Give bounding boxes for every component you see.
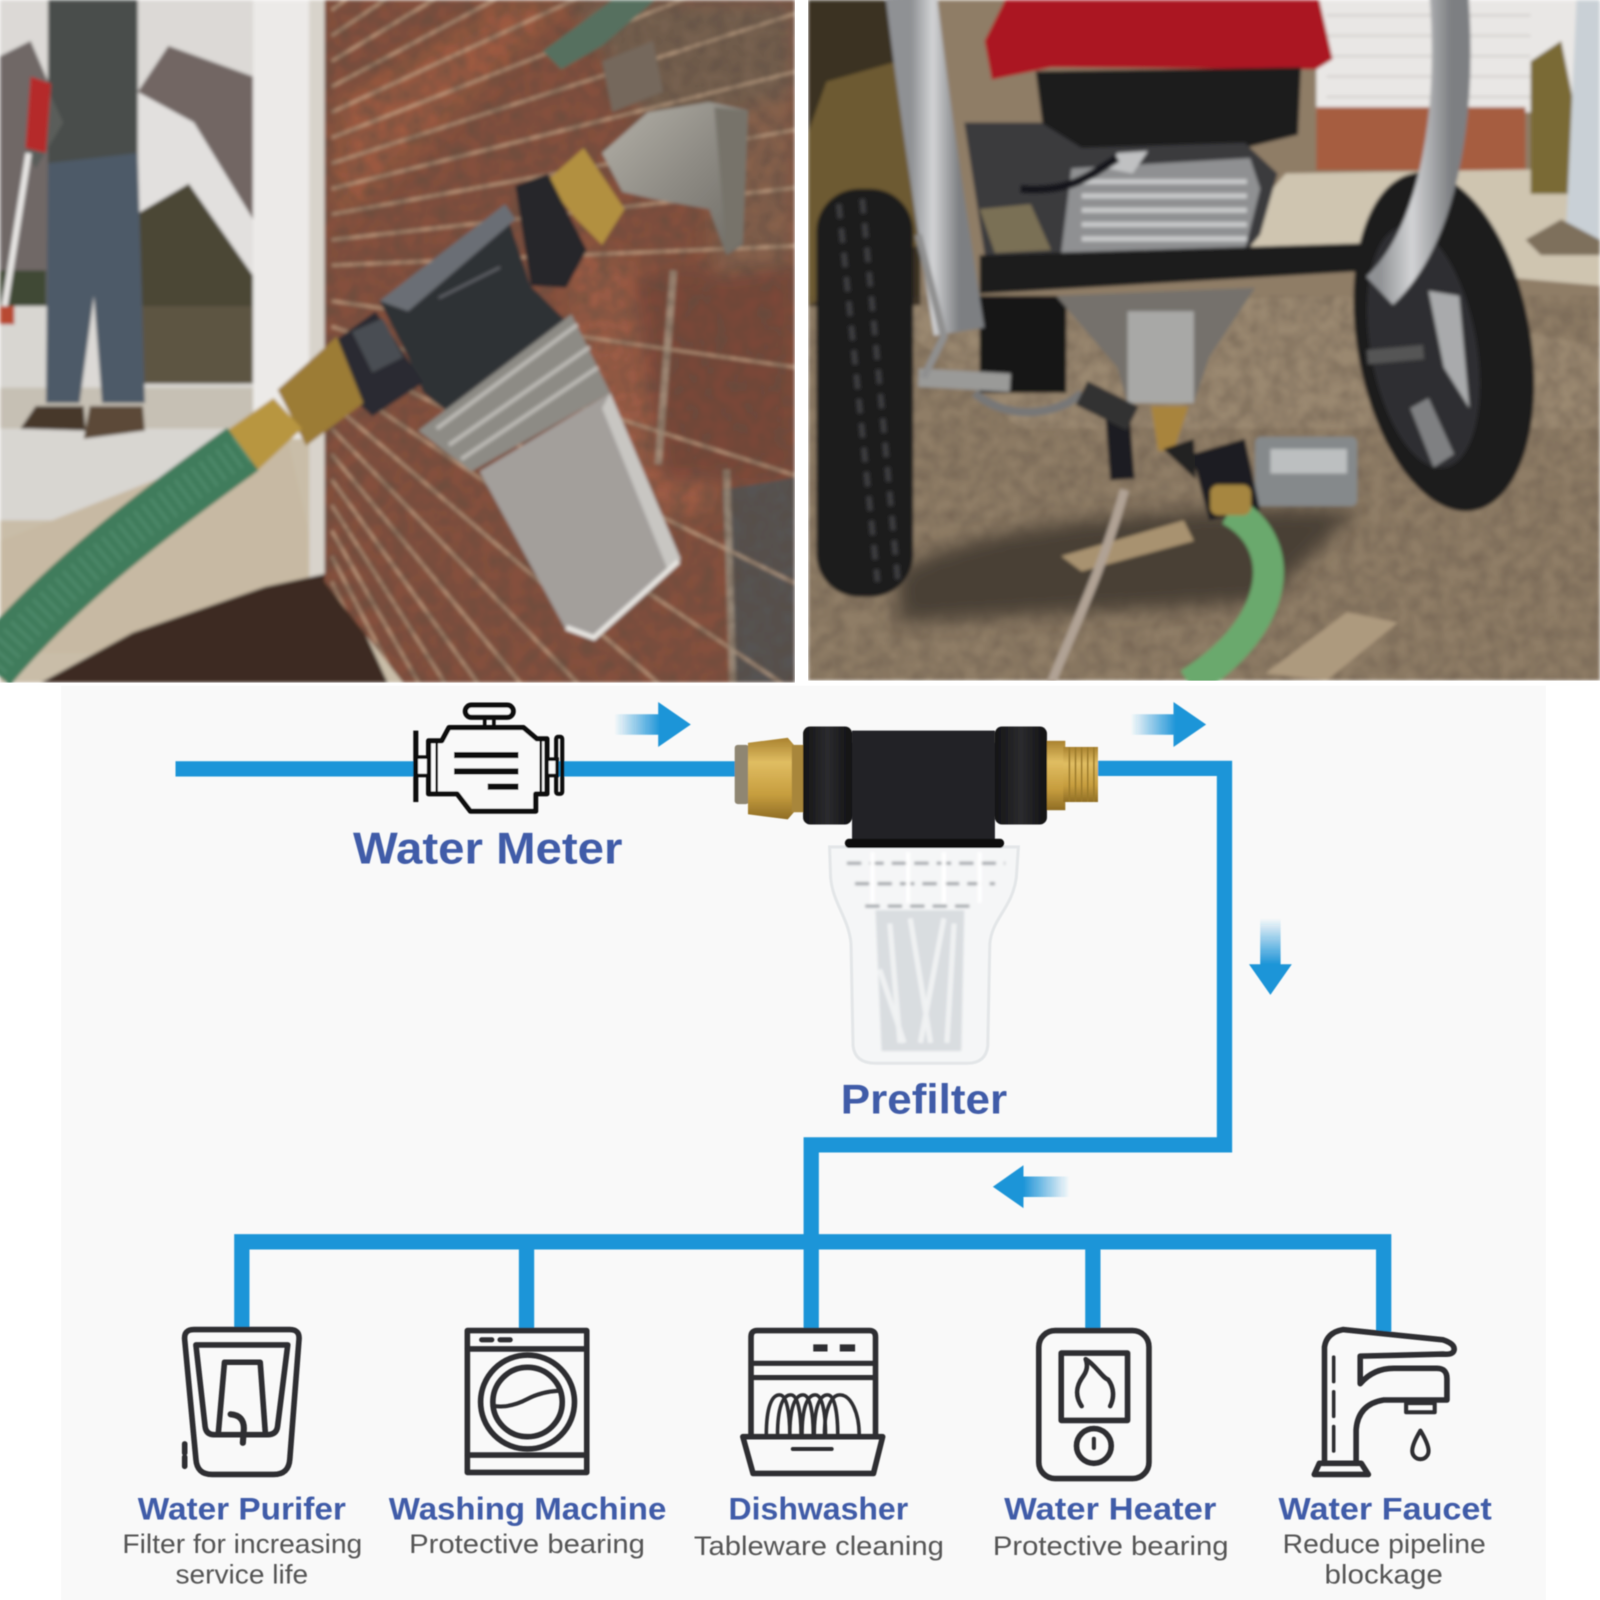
frame bar [980, 243, 1376, 294]
arrow: flow down [1249, 918, 1292, 995]
icon: dishwasher [743, 1331, 883, 1473]
person [48, 0, 138, 168]
right wheel [1329, 158, 1559, 526]
brass hose fitting [278, 337, 363, 446]
label: dishwasher: Dishwasher [729, 1490, 908, 1526]
product: prefilter [735, 727, 1098, 1063]
label: washing machine: Washing Machine [389, 1490, 666, 1526]
label: water purifier: service life [176, 1560, 308, 1590]
white pillar [253, 0, 310, 439]
right frame tube [1380, 0, 1451, 291]
label: dishwasher: Tableware cleaning [694, 1531, 944, 1561]
label: water heater: Water Heater [1004, 1490, 1216, 1526]
brass fitting and green hose [1189, 510, 1268, 684]
left frame tube [911, 0, 959, 332]
brass nut [546, 148, 624, 245]
dark tank under frame [980, 296, 1066, 393]
pipe: outlet to branch [811, 768, 1224, 1332]
label: water purifier [122, 1490, 362, 1590]
pipe: distribution line [242, 1242, 1384, 1332]
pressure hose and connector [1117, 413, 1122, 480]
label: water faucet: blockage [1324, 1560, 1443, 1590]
filter housing [515, 173, 587, 288]
black housing [842, 743, 1005, 816]
flow diagram [122, 702, 1492, 1590]
ground texture [808, 296, 1600, 681]
icon: washing machine [467, 1331, 587, 1472]
arrow: flow left [993, 1165, 1069, 1208]
engine [964, 122, 1278, 255]
panel: right photo, filter on pressure washer [808, 0, 1600, 684]
label: water meter: Water Meter [353, 822, 622, 873]
panel: water flow diagram background [61, 686, 1546, 1600]
panel: left photo, filter on outdoor faucet [0, 0, 795, 683]
green hose [0, 449, 243, 668]
icon: water purifier [185, 1330, 299, 1474]
icon: water faucet [1314, 1330, 1454, 1474]
filter bowl [480, 393, 681, 640]
mesh screen [876, 910, 964, 1051]
arrow: flow right 1 [614, 702, 691, 747]
label: washing machine [389, 1490, 666, 1559]
left brass nut [735, 745, 749, 804]
label: water faucet: Reduce pipeline [1283, 1529, 1486, 1559]
mortar joints [329, 0, 795, 682]
brick texture [324, 0, 795, 683]
small filter [1255, 437, 1357, 506]
ground shadow [898, 509, 1357, 622]
arrow: flow right 2 [1131, 702, 1206, 747]
label: water heater [993, 1490, 1229, 1561]
label: water faucet [1279, 1490, 1492, 1590]
icon: water heater [1039, 1331, 1149, 1479]
label: washing machine: Protective bearing [409, 1529, 645, 1559]
pump [1056, 288, 1255, 403]
red cover [985, 0, 1333, 80]
brick wall [324, 0, 795, 683]
label: water purifier: Water Purifer [138, 1490, 346, 1526]
faucet [543, 0, 655, 69]
label: water faucet: Water Faucet [1279, 1490, 1492, 1526]
label: water heater: Protective bearing [993, 1531, 1229, 1561]
label: water purifier: Filter for increasing [122, 1529, 362, 1559]
mulch [41, 571, 388, 683]
clear bowl [830, 847, 1018, 1063]
black tank [1036, 67, 1301, 153]
right brass fitting [1045, 741, 1065, 810]
label: dishwasher [694, 1490, 944, 1561]
background [808, 0, 920, 306]
label: prefilter: Prefilter [841, 1075, 1007, 1122]
left wheel [816, 189, 913, 597]
pipe: inlet line [176, 761, 737, 777]
icon: water meter engine [413, 705, 562, 811]
